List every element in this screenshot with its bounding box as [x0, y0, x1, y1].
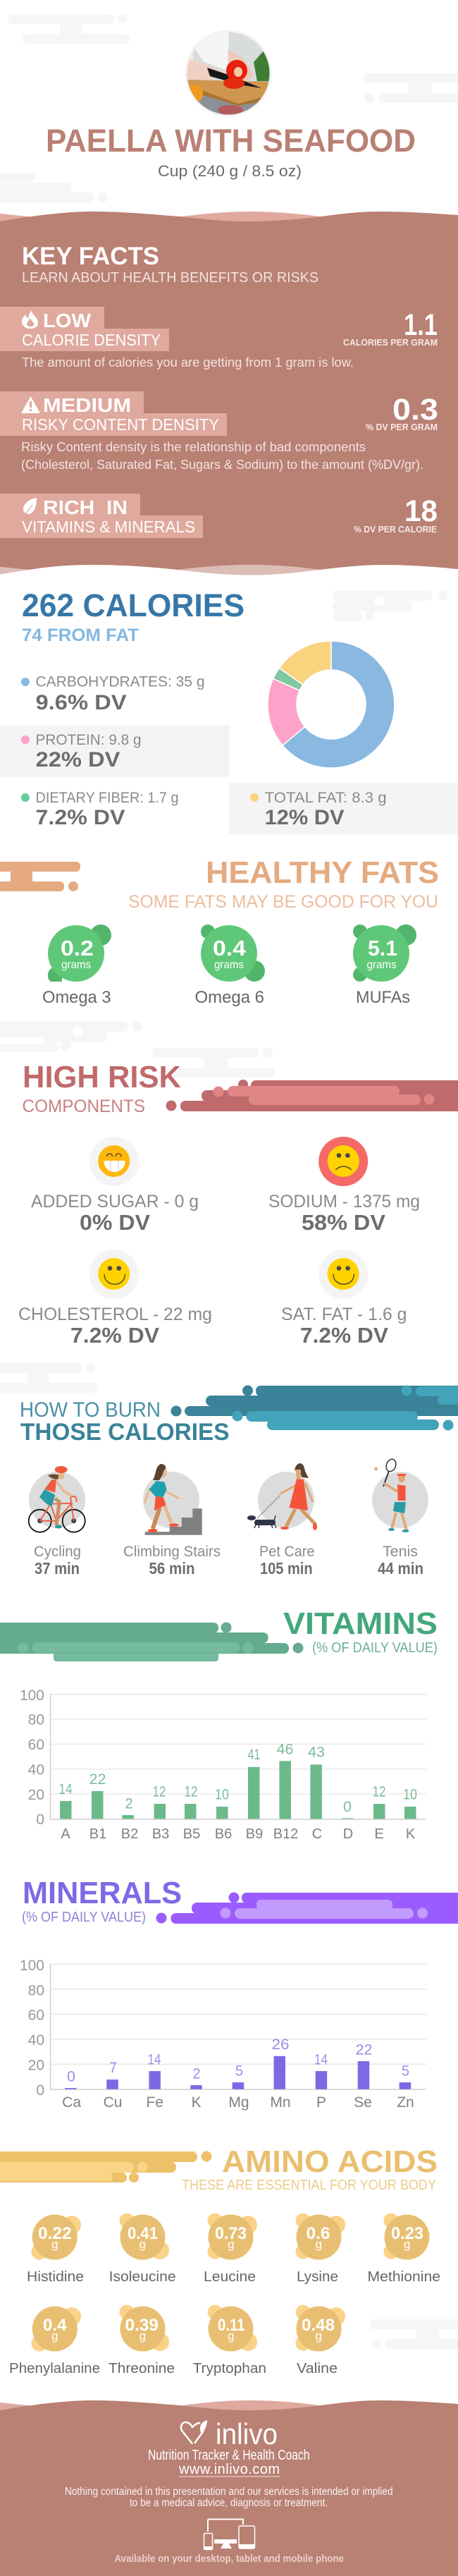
- fact: medium risky content density: RISKY CONTENT DENSITY: [22, 415, 219, 434]
- amino: valine: [296, 2305, 345, 2376]
- amino: histidine: Histidine: [27, 2269, 84, 2285]
- category labels: C: [312, 1826, 322, 1842]
- category labels: B1: [89, 1826, 106, 1842]
- decoration: teal bars: [171, 1385, 458, 1430]
- value labels: 10: [215, 1787, 229, 1803]
- subheading: LEARN ABOUT HEALTH BENEFITS OR RISKS: [22, 270, 318, 286]
- axis labels: 0: [36, 1812, 44, 1828]
- value labels: 5: [235, 2063, 243, 2079]
- logo: inlivo: inlivo: [216, 2417, 278, 2450]
- background clouds: header: [0, 14, 458, 202]
- decoration: orange bars: [0, 862, 80, 891]
- item: cholesterol: [18, 1250, 212, 1348]
- amino: methionine: g: [404, 2238, 410, 2251]
- amino: isoleucine: g: [140, 2238, 146, 2251]
- amino: lysine: Lysine: [297, 2269, 338, 2285]
- amino: phenylalanine: [9, 2306, 100, 2376]
- activity: tennis: 44 min: [378, 1559, 423, 1577]
- axis labels: 80: [28, 1712, 44, 1728]
- badge: omega 3: 0.2: [61, 936, 94, 960]
- amino: methionine: [368, 2213, 440, 2285]
- subheading: (% OF DAILY VALUE): [22, 1910, 146, 1925]
- panel: vitamins: [0, 1606, 438, 1842]
- legend: total fat: TOTAL FAT: 8.3 g: [265, 790, 387, 806]
- badge: omega 6: grams: [214, 959, 244, 971]
- fact: medium risky content density: [0, 391, 438, 472]
- category labels: Ca: [62, 2094, 81, 2111]
- item: added sugar: ADDED SUGAR - 0 g: [31, 1192, 199, 1211]
- category labels: B12: [273, 1826, 298, 1842]
- bars: [60, 1761, 416, 1819]
- panel: calories: [0, 587, 458, 834]
- fact: rich in vitamins and minerals: 18: [404, 494, 438, 528]
- food photo: [185, 30, 272, 117]
- amino: leucine: 0.73: [215, 2224, 247, 2243]
- bar chart: minerals: [20, 1958, 426, 2111]
- wave: top light: [0, 2400, 324, 2413]
- amino: valine: 0.48: [302, 2316, 335, 2335]
- fact: medium risky content density: % DV PER GRAM: [366, 422, 438, 432]
- axis labels: [20, 1958, 44, 2099]
- value labels: [59, 1741, 417, 1815]
- value labels: 41: [248, 1747, 261, 1763]
- panel: how to burn those calories: [20, 1385, 458, 1577]
- amino: valine: Valine: [297, 2361, 338, 2376]
- panel: high risk components: [18, 1060, 458, 1348]
- fact: low calorie density: [0, 307, 438, 370]
- decoration: red bars: [166, 1080, 458, 1111]
- axis labels: 40: [28, 2032, 44, 2049]
- item: sodium: [268, 1137, 420, 1235]
- decoration: purple bars: [156, 1893, 458, 1924]
- activity: climbing stairs: 56 min: [149, 1559, 194, 1577]
- amino: isoleucine: [109, 2213, 176, 2285]
- fact: rich in vitamins and minerals: % DV PER CALORIE: [354, 524, 437, 535]
- value labels: 43: [308, 1745, 325, 1761]
- axis labels: 80: [28, 1982, 44, 1998]
- value labels: 22: [89, 1771, 106, 1788]
- amino: valine: g: [316, 2329, 322, 2343]
- amino: tryptophan: [193, 2305, 266, 2376]
- axis labels: 100: [20, 1687, 44, 1704]
- bars: [65, 2056, 411, 2089]
- panel: amino acids: [0, 2144, 440, 2376]
- category labels: B3: [152, 1826, 169, 1842]
- background cloud: [333, 590, 447, 621]
- value labels: 2: [193, 2065, 200, 2082]
- item: saturated fat: [281, 1250, 407, 1348]
- amino: lysine: g: [316, 2238, 322, 2251]
- axis labels: 20: [28, 2058, 44, 2073]
- category labels: A: [61, 1826, 70, 1842]
- heading: HEALTHY FATS: [206, 855, 439, 890]
- activity: climbing stairs: [123, 1464, 221, 1577]
- heading: HIGH RISK: [23, 1060, 181, 1094]
- background clouds: mid: [0, 1021, 275, 1078]
- heading line 2: THOSE CALORIES: [20, 1419, 230, 1446]
- footer background: [0, 2400, 458, 2576]
- icon: warning triangle: [21, 396, 40, 413]
- legend: carbohydrates: 9.6% DV: [35, 691, 127, 714]
- category labels: Cu: [104, 2094, 122, 2111]
- category labels: Mg: [228, 2094, 249, 2111]
- category labels: B5: [183, 1826, 200, 1842]
- amino: lysine: [296, 2213, 345, 2285]
- tagline: Nutrition Tracker & Health Coach: [148, 2448, 310, 2463]
- amino: histidine: [27, 2214, 84, 2285]
- category labels: Fe: [146, 2094, 163, 2111]
- heading: MINERALS: [23, 1876, 182, 1910]
- disclaimer: to be a medical advice, diagnosis or treatment.: [130, 2497, 328, 2509]
- icon: devices: [204, 2519, 255, 2550]
- item: cholesterol: 7.2% DV: [70, 1323, 159, 1348]
- activity: tennis: Tenis: [383, 1544, 418, 1560]
- value labels: 5: [402, 2063, 409, 2079]
- fact: rich in vitamins and minerals: [0, 494, 438, 538]
- value labels: 12: [372, 1784, 386, 1800]
- fact: medium risky content density: (Cholesterol, Saturated Fat, Sugars & Sodium) to the amount (%DV/gr).: [21, 458, 423, 472]
- amino: lysine: 0.6: [306, 2224, 330, 2243]
- decoration: yellow bars: [0, 2151, 211, 2183]
- axis labels: 40: [28, 1762, 44, 1778]
- category labels: P: [316, 2094, 326, 2111]
- legend: total fat: [229, 783, 458, 834]
- badge: omega 6: Omega 6: [194, 988, 264, 1007]
- legend: dietary fiber: [21, 790, 179, 829]
- amino: leucine: Leucine: [204, 2269, 256, 2285]
- subheading: THESE ARE ESSENTIAL FOR YOUR BODY: [182, 2178, 436, 2193]
- legend: dietary fiber: 7.2% DV: [35, 806, 125, 829]
- fact: rich in vitamins and minerals: RICH IN: [43, 496, 128, 518]
- icon: leaf: [23, 498, 37, 514]
- legend: carbohydrates: [21, 674, 204, 714]
- amino: threonine: Threonine: [109, 2361, 175, 2376]
- amino: methionine: Methionine: [368, 2269, 440, 2285]
- fact: low calorie density: 1.1: [404, 308, 438, 342]
- category labels: K: [406, 1826, 416, 1842]
- panel: footer: [0, 2400, 458, 2576]
- legend: carbohydrates: CARBOHYDRATES: 35 g: [35, 674, 204, 690]
- amino: tryptophan: g: [228, 2329, 234, 2343]
- fact: medium risky content density: 0.3: [392, 393, 438, 427]
- axis labels: 100: [20, 1958, 44, 1974]
- panel: minerals: [20, 1876, 458, 2111]
- amino: threonine: [109, 2305, 175, 2376]
- value labels: 22: [355, 2041, 372, 2058]
- disclaimer: [65, 2486, 393, 2509]
- legend: protein: [0, 725, 230, 777]
- amino: methionine: 0.23: [391, 2224, 423, 2243]
- subheading: COMPONENTS: [23, 1097, 145, 1116]
- category labels: D: [343, 1826, 353, 1842]
- heading: KEY FACTS: [22, 243, 159, 270]
- value labels: 14: [148, 2051, 161, 2068]
- badge: omega 3: grams: [61, 959, 91, 971]
- axis labels: 20: [28, 1787, 44, 1803]
- logo: inlivo: [181, 2417, 278, 2450]
- item: sodium: 58% DV: [302, 1210, 385, 1235]
- panel background: [0, 212, 458, 570]
- serving size: Cup (240 g / 8.5 oz): [158, 162, 302, 180]
- fact: low calorie density: CALORIES PER GRAM: [343, 337, 438, 348]
- category labels: K: [192, 2094, 202, 2111]
- value labels: 2: [125, 1795, 132, 1812]
- category labels: [62, 2094, 414, 2111]
- value labels: 26: [272, 2037, 289, 2053]
- value labels: 10: [403, 1787, 417, 1803]
- fact: low calorie density: The amount of calories you are getting from 1 gram is low.: [22, 355, 354, 370]
- amino: tryptophan: Tryptophan: [193, 2361, 266, 2376]
- activity: cycling: Cycling: [34, 1544, 81, 1560]
- fact: rich in vitamins and minerals: VITAMINS & MINERALS: [22, 518, 195, 536]
- activity: tennis: [372, 1458, 428, 1577]
- badge: omega 3: [42, 924, 111, 1007]
- value labels: 12: [185, 1784, 197, 1800]
- fact: medium risky content density: MEDIUM: [43, 394, 131, 416]
- decoration: green bars: [0, 1622, 303, 1661]
- legend: protein: 22% DV: [35, 748, 120, 771]
- fact: low calorie density: CALORIE DENSITY: [22, 331, 161, 349]
- legend: dietary fiber: DIETARY FIBER: 1.7 g: [35, 790, 179, 806]
- amino: phenylalanine: Phenylalanine: [9, 2361, 100, 2376]
- activity: pet care: [247, 1463, 317, 1577]
- panel: healthy fats: [0, 855, 439, 1007]
- panel: key facts: [0, 212, 458, 575]
- donut chart: [268, 641, 395, 768]
- badge: mufas: MUFAs: [356, 988, 410, 1007]
- item: added sugar: 0% DV: [80, 1210, 150, 1235]
- item: sodium: SODIUM - 1375 mg: [268, 1192, 420, 1211]
- badge: mufas: grams: [366, 959, 396, 971]
- category labels: B2: [121, 1826, 138, 1842]
- category labels: [61, 1826, 416, 1842]
- legend: total fat: 12% DV: [265, 806, 345, 829]
- title: PAELLA WITH SEAFOOD: [46, 123, 416, 159]
- subheading: (% OF DAILY VALUE): [312, 1640, 438, 1656]
- badge: omega 3: Omega 3: [42, 988, 111, 1007]
- background cloud: amino: [369, 2319, 458, 2349]
- badge: omega 6: [194, 924, 265, 1007]
- badge: mufas: 5.1: [368, 936, 397, 960]
- item: saturated fat: 7.2% DV: [300, 1323, 388, 1348]
- wave: top light: [0, 212, 324, 224]
- amino: leucine: [204, 2213, 257, 2285]
- amino: histidine: 0.22: [38, 2224, 72, 2243]
- icon: flame: [22, 310, 38, 329]
- category labels: B9: [246, 1826, 263, 1842]
- heading line 1: HOW TO BURN: [20, 1398, 161, 1422]
- availability note: Available on your desktop, tablet and mobile phone: [114, 2553, 344, 2565]
- fact: low calorie density: LOW: [43, 310, 92, 331]
- item: saturated fat: SAT. FAT - 1.6 g: [281, 1305, 407, 1324]
- category labels: Mn: [270, 2094, 291, 2111]
- heading: AMINO ACIDS: [222, 2144, 438, 2179]
- value labels: 0: [67, 2069, 75, 2085]
- disclaimer: Nothing contained in this presentation and our services is intended or implied: [65, 2486, 393, 2498]
- amino: histidine: g: [51, 2238, 58, 2251]
- category labels: B6: [215, 1826, 232, 1842]
- legend: protein: PROTEIN: 9.8 g: [35, 732, 141, 748]
- category labels: Zn: [397, 2094, 414, 2111]
- value labels: 12: [152, 1784, 166, 1800]
- value labels: 46: [276, 1741, 293, 1757]
- amino: tryptophan: 0.11: [218, 2316, 245, 2335]
- activity: cycling: 37 min: [35, 1559, 80, 1577]
- activity: climbing stairs: Climbing Stairs: [123, 1544, 221, 1560]
- activity: pet care: 105 min: [260, 1559, 313, 1577]
- value labels: [67, 2037, 409, 2085]
- badge: mufas: [353, 924, 416, 1007]
- axis labels: 60: [28, 2008, 44, 2024]
- website link: www.inlivo.com: [178, 2462, 280, 2477]
- activity: cycling: [29, 1466, 85, 1577]
- amino: isoleucine: 0.41: [128, 2224, 158, 2243]
- value labels: 14: [314, 2051, 328, 2068]
- amino: phenylalanine: g: [51, 2329, 58, 2343]
- amino: phenylalanine: 0.4: [43, 2316, 67, 2335]
- amino: leucine: g: [228, 2238, 234, 2251]
- badge: omega 6: 0.4: [213, 936, 247, 960]
- subheading: 74 FROM FAT: [22, 625, 139, 645]
- subheading: SOME FATS MAY BE GOOD FOR YOU: [128, 892, 438, 912]
- amino: threonine: g: [140, 2329, 146, 2343]
- axis labels: [20, 1687, 44, 1828]
- amino: isoleucine: Isoleucine: [109, 2269, 176, 2285]
- category labels: Se: [354, 2094, 372, 2111]
- heading: 262 CALORIES: [22, 587, 245, 623]
- bar chart: vitamins: [20, 1687, 426, 1842]
- value labels: 0: [343, 1799, 352, 1815]
- value labels: 14: [59, 1781, 73, 1797]
- item: cholesterol: CHOLESTEROL - 22 mg: [18, 1305, 212, 1324]
- background cloud: burn: [0, 1363, 98, 1393]
- amino: threonine: 0.39: [125, 2316, 159, 2335]
- axis labels: 0: [36, 2082, 44, 2099]
- value labels: 7: [109, 2060, 117, 2076]
- fact: medium risky content density: Risky Content density is the relationship of bad components: [21, 440, 366, 454]
- heading: VITAMINS: [283, 1606, 438, 1641]
- wave: bottom light: [0, 565, 318, 575]
- axis labels: 60: [28, 1737, 44, 1753]
- category labels: E: [374, 1826, 384, 1842]
- item: added sugar: [31, 1137, 199, 1235]
- activity: pet care: Pet Care: [259, 1544, 314, 1560]
